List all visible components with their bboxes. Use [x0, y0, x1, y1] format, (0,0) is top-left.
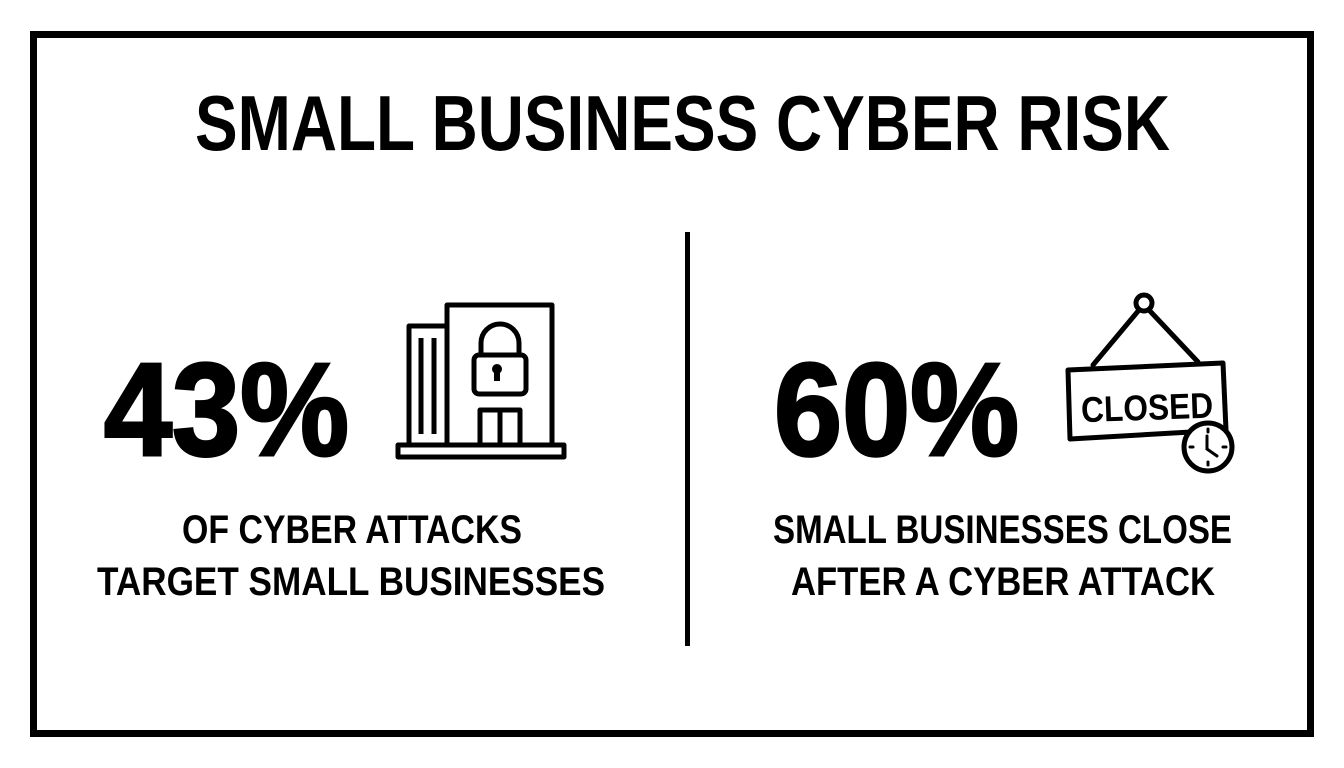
right caption: SMALL BUSINESSES CLOSE — [773, 508, 1232, 552]
icon: building with lock — [398, 305, 564, 457]
right caption: AFTER A CYBER ATTACK — [791, 560, 1215, 604]
stat number 60%: 60% — [774, 336, 1019, 483]
keyhole — [492, 364, 502, 381]
left caption: TARGET SMALL BUSINESSES — [97, 560, 605, 604]
divider — [685, 232, 690, 646]
right caption — [773, 508, 1232, 604]
stat number 43%: 43% — [104, 336, 349, 483]
panel: right stat — [773, 295, 1232, 604]
icon: closed sign with clock: CLOSED — [1080, 385, 1214, 430]
left caption — [97, 508, 605, 604]
left caption: OF CYBER ATTACKS — [182, 508, 522, 552]
icon: closed sign with clock — [1068, 295, 1232, 471]
panel: left stat — [97, 305, 605, 604]
